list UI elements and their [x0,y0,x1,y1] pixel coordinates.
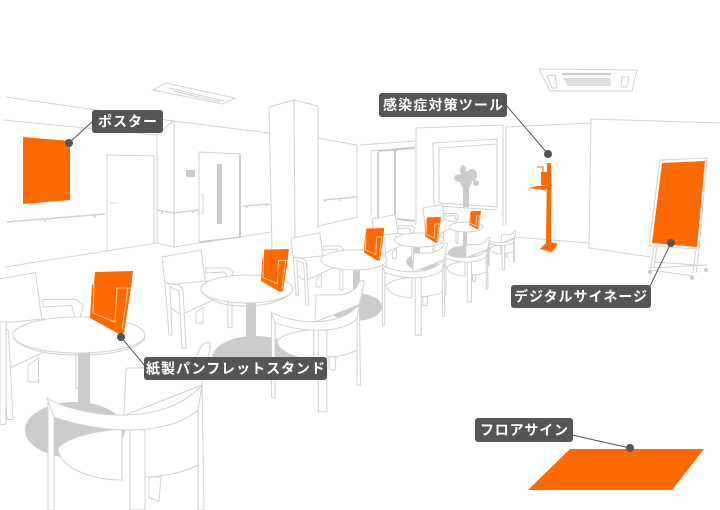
right wall [318,138,358,226]
icon: plant [454,165,479,207]
pillar [269,100,318,250]
alcove wall [416,123,591,225]
callout: floor sign [475,418,634,452]
chair row 3 [382,243,447,335]
callout: poster: ポスター [98,114,157,130]
side chair left [162,250,233,348]
table 3 with pamphlet stand [321,228,387,302]
window [371,147,415,221]
side chair [291,233,344,305]
digital signage [648,158,708,280]
thermostat [186,170,195,177]
callout: digital signage: デジタルサイネージ [514,288,647,304]
chair row right [488,231,516,270]
callout: paper pamphlet stand: 紙製パンフレットスタンド [146,360,325,376]
left chair [0,272,84,425]
callout: infection control tools: 感染症対策ツール [383,97,503,113]
far table and pamphlet stand [449,211,483,249]
left door [107,155,154,251]
double door [199,152,241,242]
floor sign [528,449,704,490]
table 4 with pamphlet stand [394,217,444,266]
ceiling vent [153,83,235,104]
chair front [47,343,210,510]
callout: infection control tools [379,93,552,158]
ceiling air conditioner [539,69,637,91]
table bases [25,246,476,458]
callout: digital signage [511,239,675,308]
niche [433,139,497,210]
callout: paper pamphlet stand [117,333,327,380]
handrails [7,197,356,222]
table 1 with pamphlet stand [13,271,145,412]
chair row 2 [271,281,364,412]
sanitizer stand [528,163,558,252]
poster [23,137,70,204]
chair row 4 [444,238,490,302]
illustration: room walls [4,83,720,267]
far chairs [372,204,458,274]
large wall [514,119,720,257]
callout: floor sign: フロアサイン [480,422,568,438]
callout: poster [65,110,163,147]
table 2 with pamphlet stand [201,249,293,354]
